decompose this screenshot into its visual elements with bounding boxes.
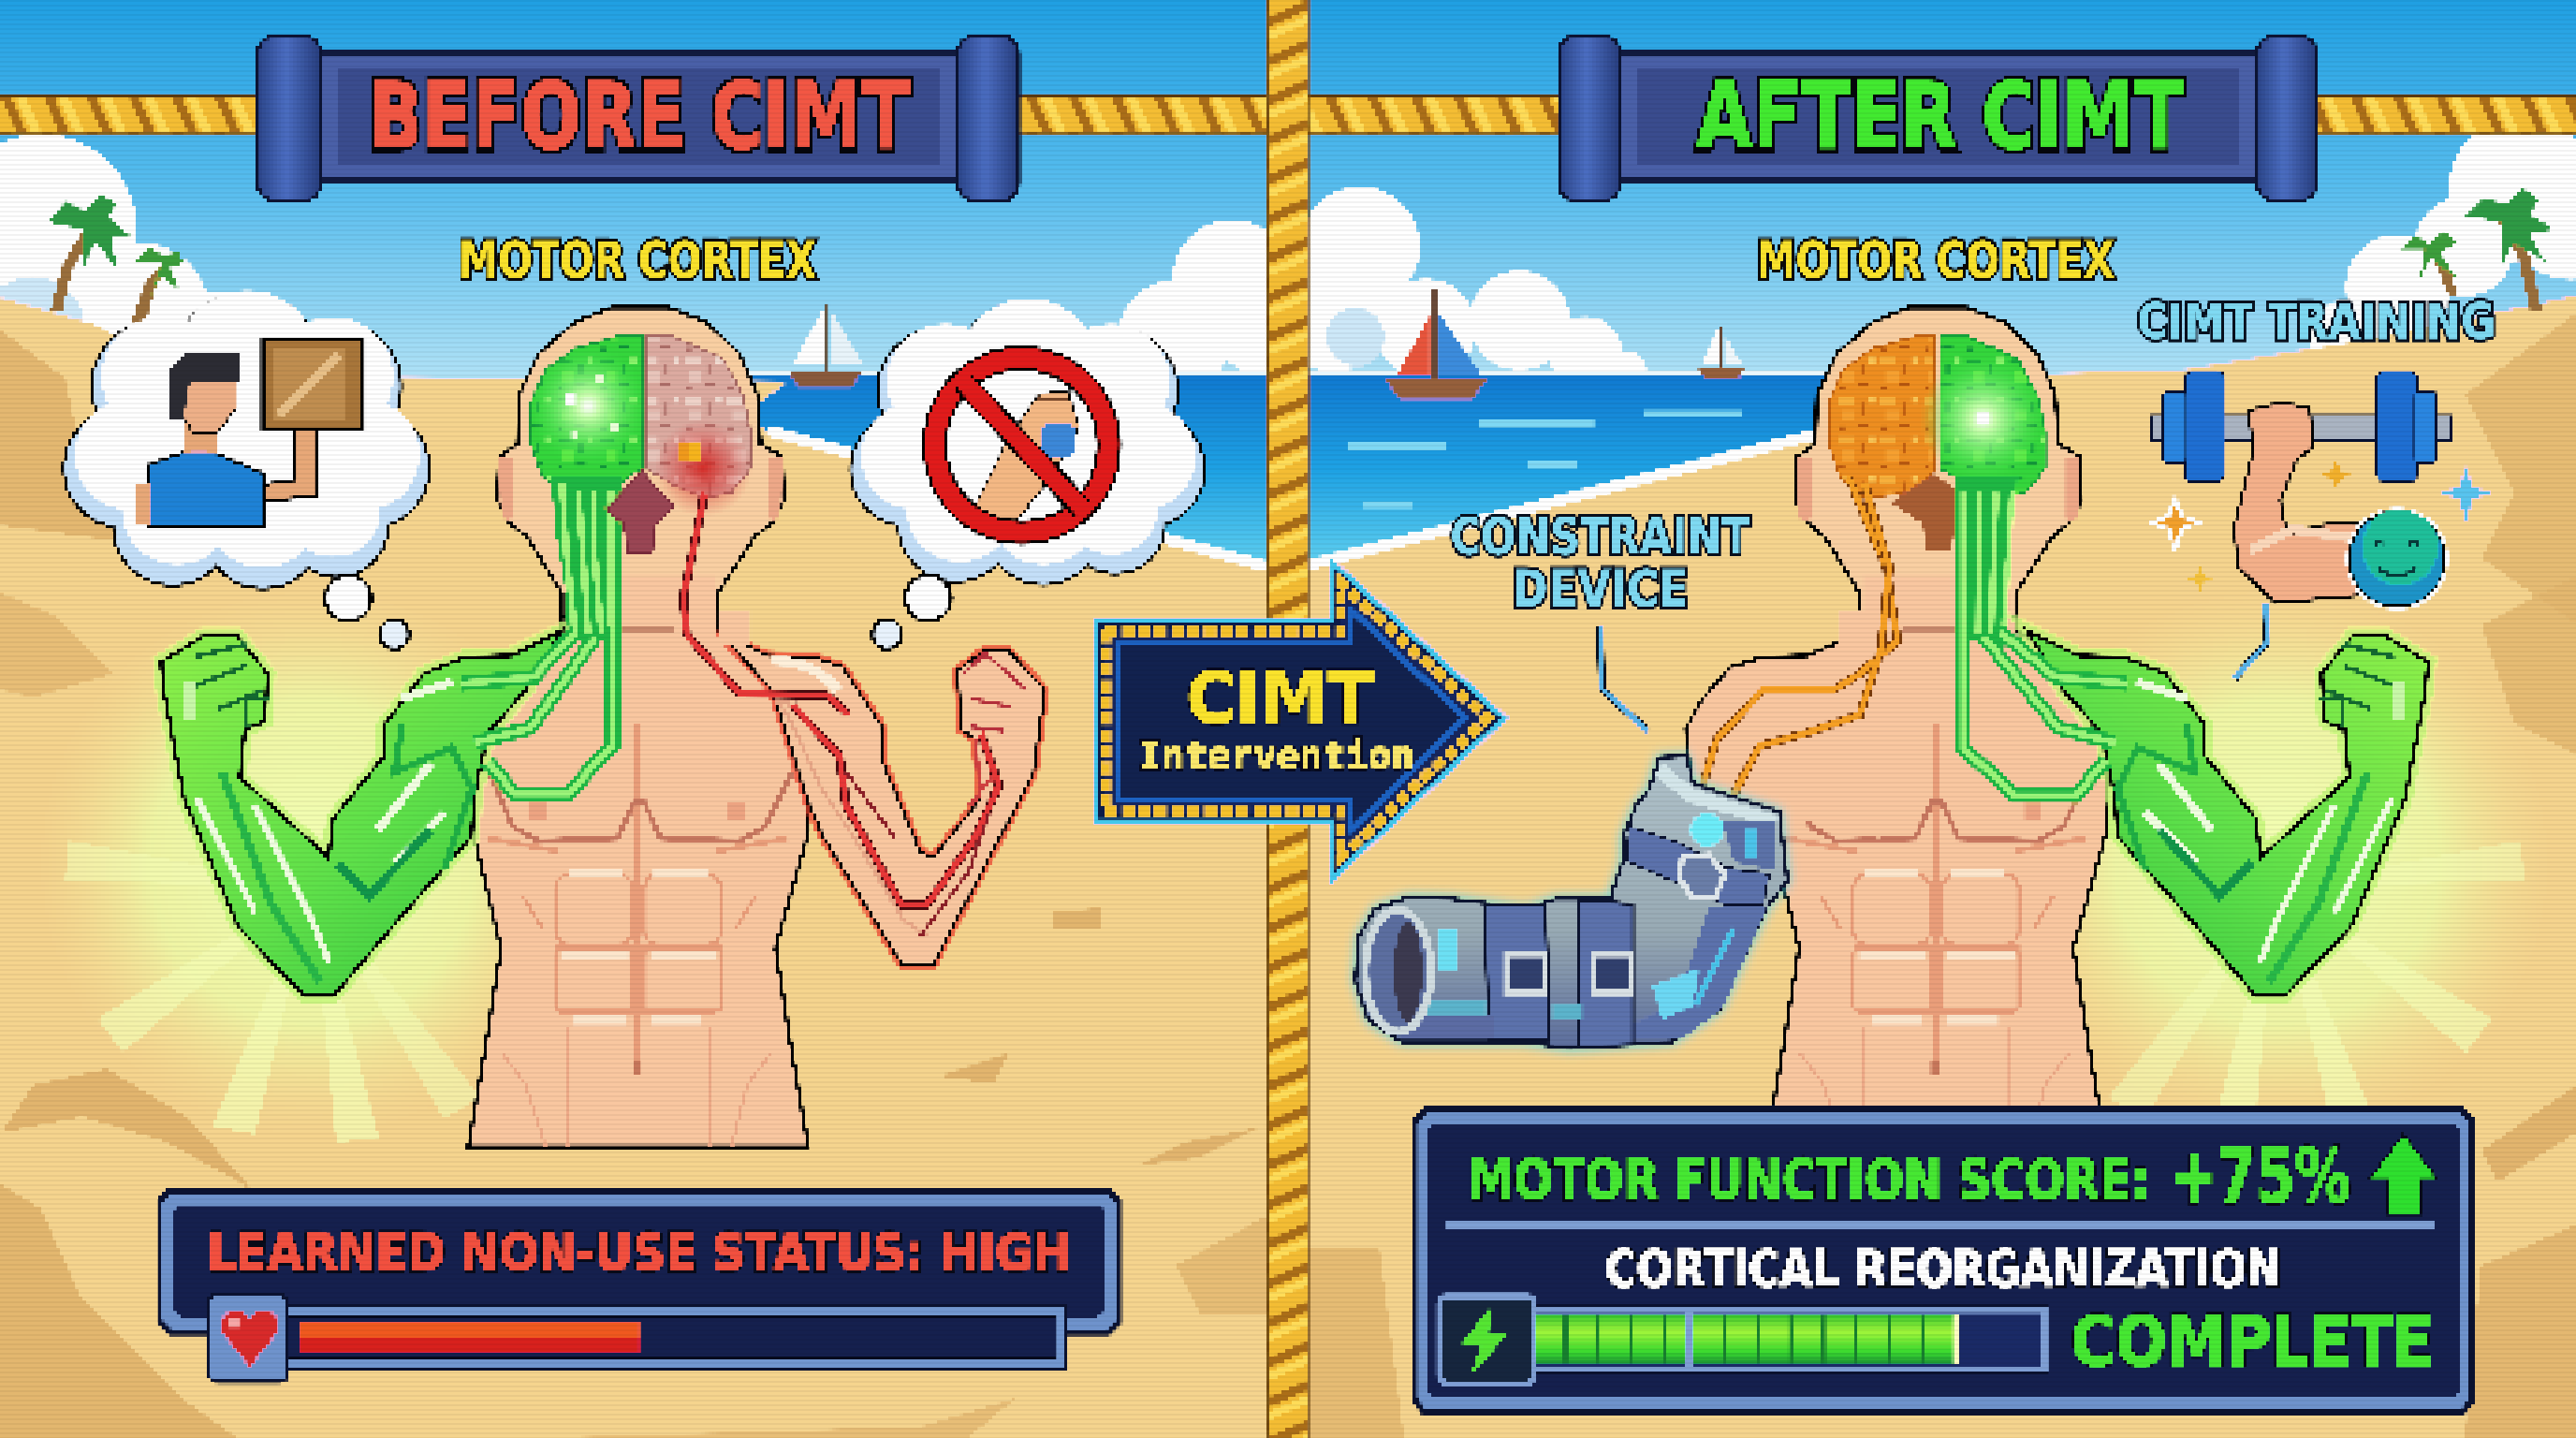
status bar (246, 1303, 1068, 1372)
left brain: active green hemisphere (529, 337, 648, 498)
horizontal rope left (0, 94, 266, 137)
score value: +75% (2170, 1134, 2351, 1222)
orange pathways to constrained arm (1702, 477, 1897, 795)
label: constraint device (1451, 506, 1749, 619)
glow rays: right arm (2006, 592, 2548, 1142)
thought bubble: no hand use (853, 299, 1203, 649)
results panel: after CIMT (1412, 1106, 2476, 1416)
horizontal rope middle (1010, 94, 1560, 137)
leader line: constraint device (1600, 624, 1647, 731)
sea (723, 374, 1268, 568)
sailboat: left panel (788, 302, 862, 388)
central vertical rope divider (1265, 0, 1310, 1438)
icon: dumbbell and flexing arm (2150, 372, 2491, 609)
flexing arm (2234, 403, 2374, 603)
heading: before CIMT: BEFORE CIMT (368, 64, 910, 170)
thought bubble: lifting a box (66, 291, 427, 649)
banner: after CIMT (1559, 37, 2317, 200)
icon: person lifting crate (135, 339, 363, 526)
banner: before CIMT (258, 37, 1018, 200)
leader line: CIMT training (2234, 605, 2267, 679)
icon: lightning energy (1439, 1297, 1534, 1384)
clouds: left panel (0, 135, 1339, 406)
weak red arm (718, 611, 1045, 964)
leader line highlight: CIMT training (2234, 605, 2267, 679)
figure: after CIMT (1686, 307, 2428, 1147)
right brain: recovering orange hemisphere (1828, 337, 1936, 498)
palm trees: left (46, 194, 184, 329)
sailboat: right panel small (1697, 327, 1745, 379)
cortical reorganization heading: CORTICAL REORGANIZATION (1605, 1240, 2282, 1299)
icon: prohibited hand grasp (935, 359, 1109, 533)
glow rays: left arm (41, 592, 583, 1142)
icon: heart (209, 1295, 287, 1382)
right brain: active green hemisphere (1921, 337, 2045, 498)
constraint device: arm cast (1355, 756, 1788, 1049)
horizontal rope right (2308, 94, 2576, 137)
arrow text: CIMT (1186, 657, 1374, 740)
label: constraint device: DEVICE (1513, 560, 1688, 619)
dumbbell (2150, 372, 2452, 481)
right figure torso and head (1766, 307, 2106, 1147)
sailboat: right panel large (1385, 289, 1486, 399)
shoreline foam (768, 431, 1268, 567)
left brainstem (607, 472, 674, 552)
healthy green arm (161, 631, 562, 996)
palm trees: right (2398, 187, 2556, 312)
right figure shoulder (1686, 611, 1881, 838)
icon: up arrow (2369, 1134, 2438, 1214)
right brainstem (1889, 473, 1978, 552)
smiley ball (2346, 507, 2448, 609)
label: CIMT training: CIMT TRAINING (2137, 294, 2496, 351)
leader line highlight: constraint device (1600, 624, 1647, 731)
sand: right panel (1306, 296, 2576, 1438)
label: constraint device: CONSTRAINT (1451, 506, 1749, 565)
figure: before CIMT (161, 307, 1045, 1147)
red damaged pathway (683, 493, 999, 936)
status panel: learned non-use (156, 1186, 1122, 1382)
sand dunes (0, 312, 2576, 1438)
left brain: damaged hemisphere (646, 337, 753, 518)
sand: left panel (0, 298, 1268, 1438)
green neural pathway (461, 477, 621, 794)
progress bar (1528, 1306, 2049, 1373)
label: motor cortex right: MOTOR CORTEX (1756, 231, 2115, 290)
complete status: COMPLETE (2071, 1302, 2434, 1382)
green pathways to right arm (1955, 477, 2128, 795)
sparkles (2152, 498, 2198, 550)
CIMT intervention arrow: Intervention (1138, 732, 1414, 778)
left figure torso and head (468, 307, 809, 1147)
divider (1447, 1223, 2435, 1229)
right figure strong green arm (2027, 631, 2428, 996)
sky background (0, 0, 2576, 381)
label: motor cortex left: MOTOR CORTEX (459, 231, 816, 290)
motor function score: MOTOR FUNCTION SCORE: (1468, 1149, 2150, 1213)
clouds: right panel (1275, 117, 2576, 391)
heading: after CIMT: AFTER CIMT (1696, 64, 2184, 170)
CIMT intervention arrow (1096, 560, 1505, 881)
status text: LEARNED NON-USE STATUS: HIGH (207, 1224, 1071, 1283)
